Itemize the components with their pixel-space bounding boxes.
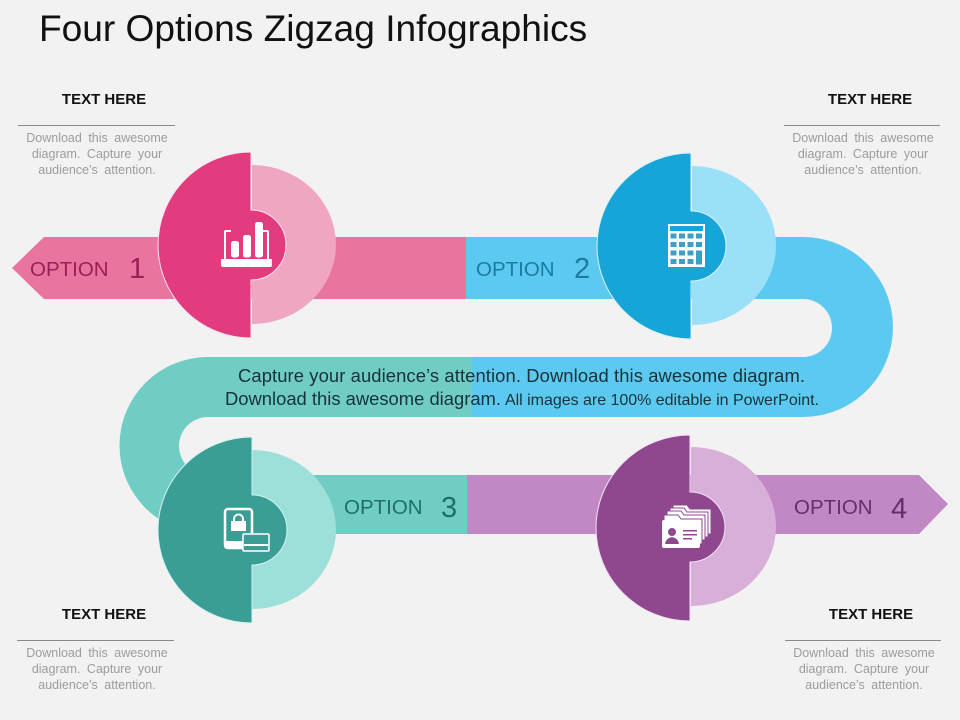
circle: option 4 [596, 435, 776, 621]
option 1 label: 1 [129, 253, 145, 285]
option 4 label: OPTION [794, 496, 873, 519]
text block: bottom left [17, 606, 174, 692]
text block: top right: Download this awesome [792, 131, 934, 145]
ribbon: blue option 2 band [466, 237, 893, 417]
text block: bottom left: Download this awesome [26, 646, 168, 660]
icon: laptop bar chart [221, 222, 272, 267]
circle: option 3 [158, 437, 336, 623]
icon: calendar grid [668, 224, 705, 267]
text block: bottom right: diagram. Capture your [799, 662, 929, 676]
dark half disc with bump [597, 153, 726, 339]
zigzag ribbon [12, 237, 948, 534]
option 4 label: 4 [891, 493, 907, 525]
text block: top left: diagram. Capture your [32, 147, 162, 161]
circle: option 1 [158, 152, 336, 338]
text block: bottom right [785, 606, 941, 692]
center caption: Download this awesome diagram. [225, 388, 501, 409]
center caption: All images are 100% editable in PowerPoint. [505, 392, 819, 409]
option 3 label: 3 [441, 492, 457, 524]
text block: top right [784, 91, 940, 177]
option 3 label [344, 492, 457, 524]
ribbon: pink option 1 arrow [12, 237, 466, 299]
center caption: Capture your audience’s attention. Download this awesome diagram. [238, 365, 805, 386]
text block: bottom right: TEXT HERE [829, 606, 913, 623]
text block: top left [18, 91, 175, 177]
ribbon: teal option 3 band [119, 357, 472, 534]
text block: bottom right: Download this awesome [793, 646, 935, 660]
text block: bottom left: audience’s attention. [38, 678, 156, 692]
text block: top right: diagram. Capture your [798, 147, 928, 161]
icon: ID card folders [662, 505, 711, 548]
text block: bottom left: TEXT HERE [62, 606, 146, 623]
dark half disc with bump [158, 152, 286, 338]
title: Four Options Zigzag Infographics [39, 7, 587, 49]
option 2 label: OPTION [476, 258, 555, 281]
option 2 label [476, 253, 590, 285]
text block: bottom right: audience’s attention. [805, 678, 923, 692]
light half ring [252, 450, 336, 609]
text block: top left: Download this awesome [26, 131, 168, 145]
dark half disc with bump [596, 435, 725, 621]
text block: bottom left: diagram. Capture your [32, 662, 162, 676]
dark half disc with bump [158, 437, 287, 623]
light half ring [252, 165, 336, 324]
text block: top right: TEXT HERE [828, 91, 912, 108]
text block: top right: audience’s attention. [804, 163, 922, 177]
text block: top left: TEXT HERE [62, 91, 146, 108]
center caption [225, 365, 819, 409]
light half ring [691, 447, 776, 606]
option 1 label [30, 253, 145, 285]
icon: tablet lock and card [224, 509, 269, 551]
circle: option 2 [597, 153, 776, 339]
text block: top left: audience’s attention. [38, 163, 156, 177]
light half ring [692, 166, 776, 325]
option 3 label: OPTION [344, 496, 423, 519]
option 1 label: OPTION [30, 258, 109, 281]
ribbon: purple option 4 arrow [467, 475, 948, 534]
option 2 label: 2 [574, 253, 590, 285]
option 4 label [794, 493, 907, 525]
